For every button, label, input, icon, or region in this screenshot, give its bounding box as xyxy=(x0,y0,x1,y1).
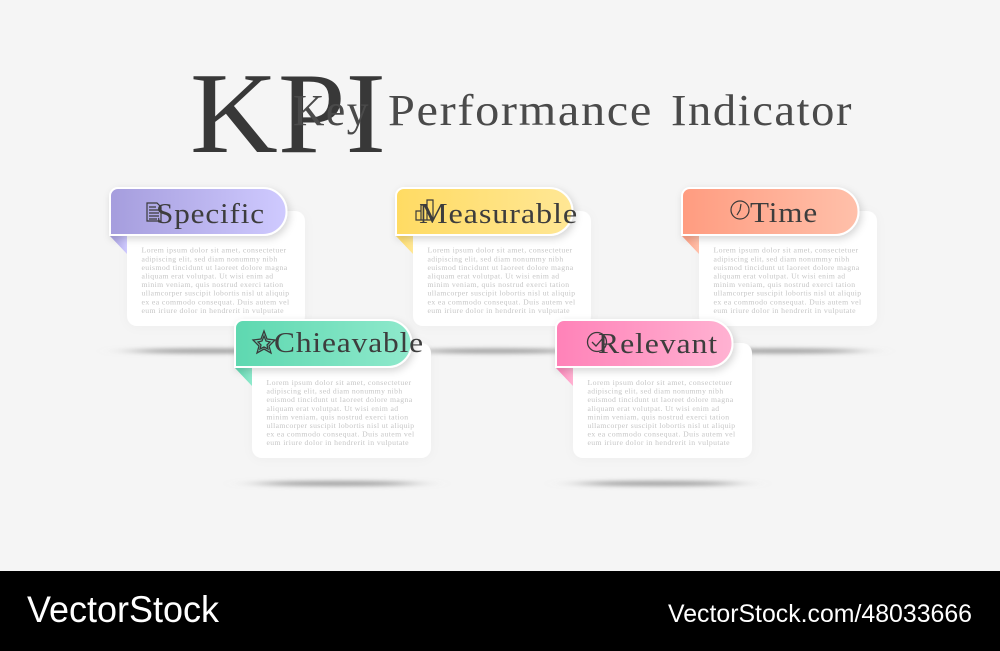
heading: Chieavable xyxy=(274,327,424,359)
floor shadow xyxy=(130,349,290,353)
body text: ullamcorper suscipit lobortis nisl ut aliquip xyxy=(428,290,576,298)
body text: adipiscing elit, sed diam nonummy nibh xyxy=(714,255,850,263)
footer url: VectorStock.com/48033666 xyxy=(668,600,972,628)
label tab xyxy=(235,320,411,367)
body text: aliquam erat volutpat. Ut wisi enim ad xyxy=(142,272,274,280)
body text: adipiscing elit, sed diam nonummy nibh xyxy=(588,388,724,396)
icon: star xyxy=(253,331,275,353)
body text: euismod tincidunt ut laoreet dolore magna xyxy=(714,264,860,272)
subtitle: Key Performance Indicator: Performance xyxy=(388,86,653,135)
subtitle: Key Performance Indicator xyxy=(293,86,853,135)
text card xyxy=(252,343,431,458)
floor shadow xyxy=(416,349,576,353)
title: KPI: KPI xyxy=(190,50,386,177)
body text: aliquam erat volutpat. Ut wisi enim ad xyxy=(428,272,560,280)
icon: document xyxy=(147,203,161,221)
body text xyxy=(266,379,415,447)
panel: Relevant xyxy=(556,320,752,486)
body text: Lorem ipsum dolor sit amet, consectetuer xyxy=(714,247,859,255)
body text: eum iriure dolor in hendrerit in vulputate xyxy=(142,307,284,315)
body text: aliquam erat volutpat. Ut wisi enim ad xyxy=(266,405,399,413)
body text xyxy=(142,247,290,315)
label tab xyxy=(556,320,732,367)
body text: minim veniam, quis nostrud exerci tation xyxy=(428,281,570,289)
body text: Lorem ipsum dolor sit amet, consectetuer xyxy=(428,247,573,255)
text card xyxy=(699,211,877,326)
text card xyxy=(413,211,591,326)
subtitle: Key Performance Indicator: Key xyxy=(293,86,370,135)
body text: ullamcorper suscipit lobortis nisl ut aliquip xyxy=(266,422,415,430)
panel: Specific xyxy=(110,188,305,353)
body text: ullamcorper suscipit lobortis nisl ut aliquip xyxy=(588,422,736,430)
folded corner xyxy=(682,236,699,254)
label tab xyxy=(110,188,286,235)
icon: bars xyxy=(416,200,433,220)
body text: eum iriure dolor in hendrerit in vulputate xyxy=(266,439,409,447)
body text: aliquam erat volutpat. Ut wisi enim ad xyxy=(588,405,720,413)
body text: minim veniam, quis nostrud exerci tation xyxy=(142,281,284,289)
label tab xyxy=(396,188,572,235)
text card xyxy=(127,211,305,326)
body text: aliquam erat volutpat. Ut wisi enim ad xyxy=(714,272,846,280)
body text: ex ea commodo consequat. Duis autem vel xyxy=(428,298,576,306)
heading: Time xyxy=(750,197,818,229)
body text: adipiscing elit, sed diam nonummy nibh xyxy=(266,388,403,396)
panel: Time xyxy=(682,188,877,353)
body text: adipiscing elit, sed diam nonummy nibh xyxy=(428,255,564,263)
body text: ex ea commodo consequat. Duis autem vel xyxy=(714,298,862,306)
body text: Lorem ipsum dolor sit amet, consectetuer xyxy=(588,379,733,387)
body text xyxy=(428,247,576,315)
folded corner xyxy=(556,368,573,386)
body text xyxy=(714,247,862,315)
panel: Achievable xyxy=(235,320,431,486)
body text xyxy=(588,379,736,447)
footer bar xyxy=(0,571,1000,651)
body text: minim veniam, quis nostrud exerci tation xyxy=(588,413,730,421)
body text: ex ea commodo consequat. Duis autem vel xyxy=(588,431,736,439)
body text: eum iriure dolor in hendrerit in vulputate xyxy=(714,307,856,315)
heading: Measurable xyxy=(419,198,578,230)
label tab xyxy=(682,188,858,235)
icon: check circle xyxy=(588,332,606,352)
folded corner xyxy=(396,236,413,254)
heading: Specific xyxy=(156,198,265,230)
body text: adipiscing elit, sed diam nonummy nibh xyxy=(142,255,278,263)
subtitle: Key Performance Indicator: Indicator xyxy=(671,86,853,135)
footer logo text: VectorStock xyxy=(27,589,219,630)
body text: minim veniam, quis nostrud exerci tation xyxy=(714,281,856,289)
text card xyxy=(573,343,752,458)
body text: euismod tincidunt ut laoreet dolore magna xyxy=(428,264,574,272)
body text: Lorem ipsum dolor sit amet, consectetuer xyxy=(266,379,412,387)
body text: ex ea commodo consequat. Duis autem vel xyxy=(142,298,290,306)
body text: minim veniam, quis nostrud exerci tation xyxy=(266,413,409,421)
body text: eum iriure dolor in hendrerit in vulputate xyxy=(428,307,570,315)
heading: Relevant xyxy=(598,328,718,360)
body text: euismod tincidunt ut laoreet dolore magna xyxy=(266,396,413,404)
body text: euismod tincidunt ut laoreet dolore magna xyxy=(588,396,734,404)
body text: eum iriure dolor in hendrerit in vulputate xyxy=(588,439,730,447)
body text: euismod tincidunt ut laoreet dolore magna xyxy=(142,264,288,272)
body text: ex ea commodo consequat. Duis autem vel xyxy=(266,431,414,439)
floor shadow xyxy=(578,481,738,486)
folded corner xyxy=(235,368,252,386)
panel: Measurable xyxy=(396,188,591,353)
floor shadow xyxy=(702,349,862,353)
folded corner xyxy=(110,236,127,254)
icon: clock xyxy=(731,201,749,219)
floor shadow xyxy=(257,481,417,486)
body text: ullamcorper suscipit lobortis nisl ut aliquip xyxy=(714,290,862,298)
body text: Lorem ipsum dolor sit amet, consectetuer xyxy=(142,247,287,255)
body text: ullamcorper suscipit lobortis nisl ut aliquip xyxy=(142,290,290,298)
